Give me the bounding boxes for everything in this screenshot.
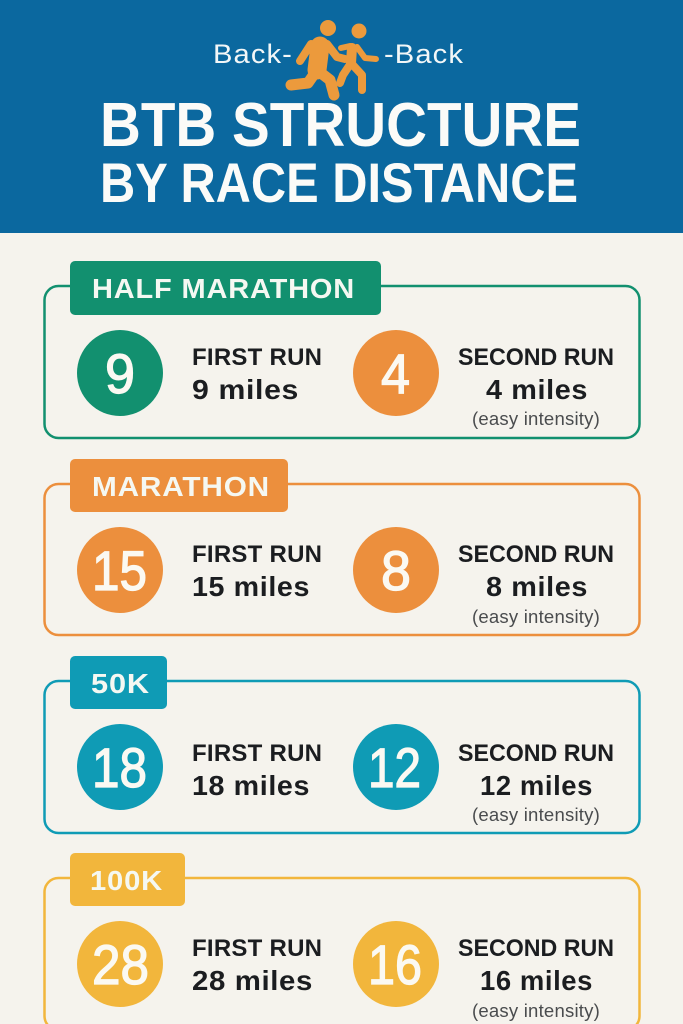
panel: 50K: 12 miles — [480, 770, 593, 801]
panel: marathon: 15 miles — [192, 571, 310, 602]
tab: marathon — [70, 459, 288, 512]
panel: 100K: (easy intensity) — [472, 1001, 600, 1021]
tab: 100K — [70, 853, 185, 906]
second run text: SECOND RUN — [458, 740, 614, 767]
icon: two runners — [291, 20, 376, 95]
panel: half marathon: HALF MARATHON — [92, 273, 355, 304]
header banner — [0, 0, 683, 233]
second run circle — [353, 527, 439, 613]
second run circle — [353, 921, 439, 1007]
panel: 50K: 12 — [368, 736, 421, 799]
panel: half marathon: 9 — [105, 342, 135, 405]
panel: half marathon: 9 miles — [192, 374, 299, 405]
panel: 50K: (easy intensity) — [472, 805, 600, 825]
tab: half marathon — [70, 261, 381, 315]
first run text: FIRST RUN — [192, 740, 322, 767]
panel: half marathon: (easy intensity) — [472, 409, 600, 429]
title line 1: BTB STRUCTURE — [100, 91, 581, 160]
panel: half marathon — [44, 261, 640, 438]
panel: marathon — [44, 459, 640, 635]
panel: 100K — [44, 853, 640, 1024]
panel: 50K — [44, 656, 640, 833]
panel: marathon: (easy intensity) — [472, 607, 600, 627]
first run circle — [77, 330, 163, 416]
first run text: FIRST RUN — [192, 541, 322, 568]
second run circle — [353, 330, 439, 416]
panel: half marathon: 4 miles — [486, 374, 588, 405]
panel: 50K: 18 miles — [192, 770, 310, 801]
subtitle left: Back- — [213, 39, 293, 69]
panel: marathon: 15 — [92, 539, 147, 602]
panel: 100K: 28 miles — [192, 965, 313, 996]
panel: 100K: 16 miles — [480, 965, 593, 996]
second run text: SECOND RUN — [458, 344, 614, 371]
first run text: FIRST RUN — [192, 935, 322, 962]
title line 2: BY RACE DISTANCE — [100, 151, 578, 214]
panel: 100K: 28 — [92, 933, 149, 996]
second run text: SECOND RUN — [458, 541, 614, 568]
panel: 50K: 18 — [92, 736, 147, 799]
panel: marathon: 8 miles — [486, 571, 588, 602]
panel: 100K: 100K — [90, 865, 163, 896]
first run circle — [77, 921, 163, 1007]
first run text: FIRST RUN — [192, 344, 322, 371]
second run circle — [353, 724, 439, 810]
subtitle right: -Back — [384, 39, 464, 69]
panel: 100K: 16 — [368, 933, 422, 996]
tab: 50K — [70, 656, 167, 709]
panel: 50K: 50K — [91, 668, 150, 699]
panel: half marathon: 4 — [381, 342, 410, 405]
first run circle — [77, 724, 163, 810]
second run text: SECOND RUN — [458, 935, 614, 962]
panel: marathon: MARATHON — [92, 471, 270, 502]
panel: marathon: 8 — [381, 539, 411, 602]
first run circle — [77, 527, 163, 613]
